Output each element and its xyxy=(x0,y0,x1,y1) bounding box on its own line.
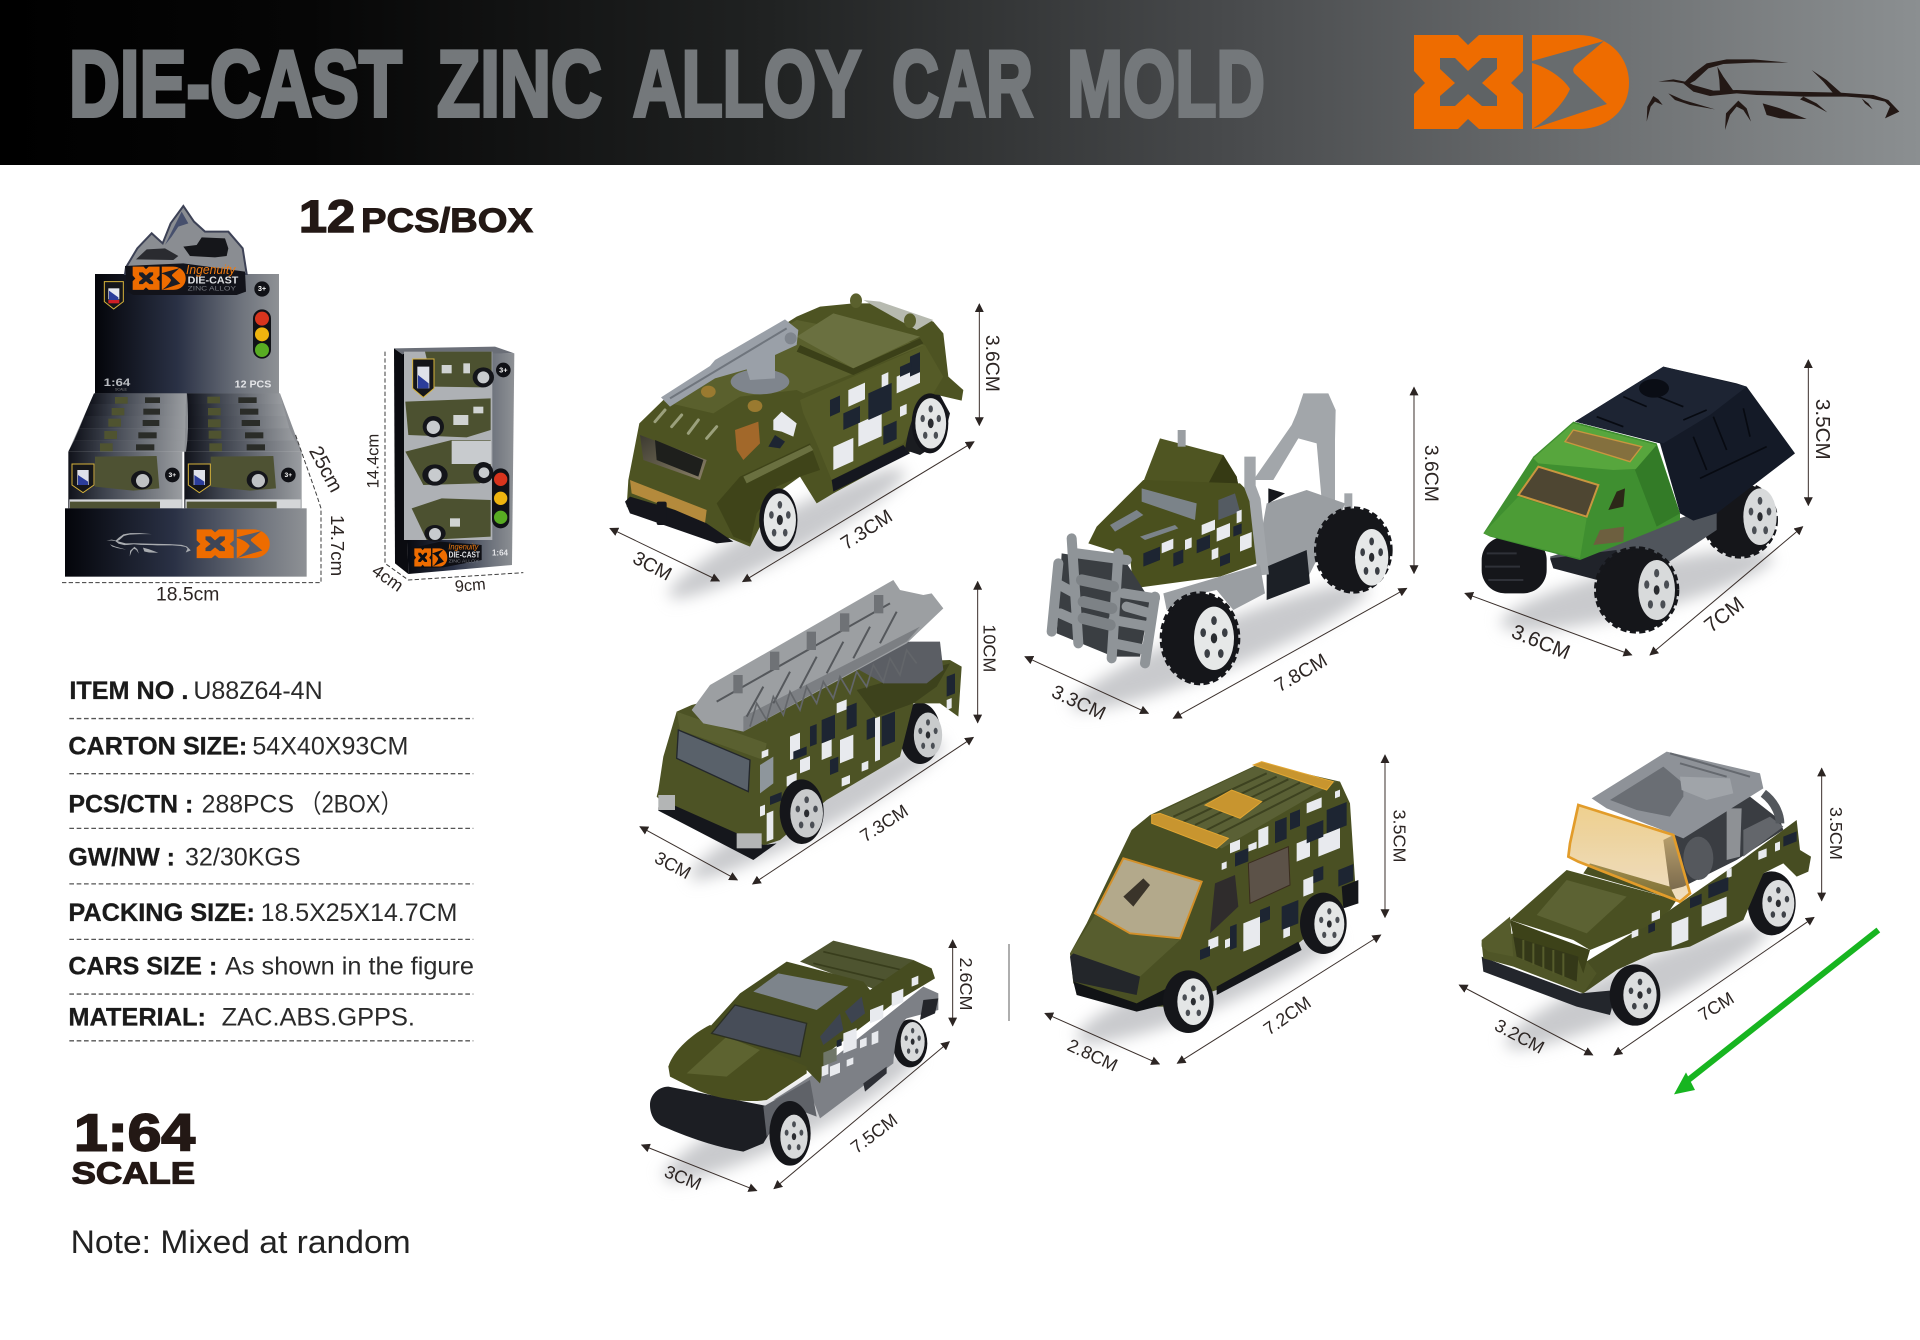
dimensions: 2.8CM xyxy=(1064,1035,1121,1075)
cars size: CARS SIZE : xyxy=(68,953,217,981)
title: MOLD xyxy=(1067,31,1265,136)
carton size xyxy=(68,733,408,761)
single retail box xyxy=(363,347,523,596)
retail box dimensions: 4cm xyxy=(368,560,407,596)
dimensions: 3.6CM xyxy=(981,335,1002,392)
title: CAR xyxy=(892,31,1033,136)
rear wheel xyxy=(1316,508,1391,592)
display box illustration xyxy=(62,206,348,606)
car: tow truck xyxy=(1025,387,1441,728)
box dimensions: 14.7cm xyxy=(327,515,348,576)
car: ladder fire truck xyxy=(640,580,999,895)
dimensions xyxy=(1045,755,1409,1075)
exhaust stack xyxy=(1250,457,1263,575)
car: green armored vehicle xyxy=(1465,360,1834,664)
packing size xyxy=(68,900,457,927)
interior xyxy=(1663,797,1783,890)
dimensions: 3.3CM xyxy=(1048,682,1109,725)
dimensions: 7.8CM xyxy=(1271,650,1331,697)
dimensions: 7.3CM xyxy=(856,800,912,846)
fender xyxy=(1163,565,1265,610)
scale label xyxy=(104,377,130,392)
grille xyxy=(1513,937,1578,982)
side panel xyxy=(800,345,943,480)
scale mark: SCALE xyxy=(72,1157,195,1191)
car: van xyxy=(1045,755,1409,1075)
dimensions xyxy=(1459,768,1846,1058)
scale mark: 1:64 xyxy=(74,1105,195,1162)
front left tire xyxy=(1482,537,1547,593)
pieces per carton xyxy=(68,791,403,819)
front box left xyxy=(68,452,182,508)
cars size: As shown in the figure xyxy=(225,953,474,981)
car silhouette xyxy=(1647,59,1899,130)
carton size: CARTON SIZE: xyxy=(68,733,247,761)
box bottom logo: Ingenuity xyxy=(448,542,479,551)
dimensions: 3.6CM xyxy=(1420,445,1441,502)
pieces per carton: 288PCS xyxy=(202,791,294,819)
windshield xyxy=(1095,858,1202,938)
fairing xyxy=(1143,438,1238,485)
body xyxy=(627,303,963,547)
dimensions: 3.5CM xyxy=(1389,810,1409,862)
cargo bed xyxy=(800,941,913,990)
rear wheel xyxy=(1704,483,1777,557)
carton size: 54X40X93CM xyxy=(252,733,408,761)
front wheel xyxy=(780,779,824,844)
tier rows of boxes xyxy=(68,393,302,452)
dimensions xyxy=(1025,387,1441,725)
box dimensions: 25cm xyxy=(304,443,347,496)
dimensions: 3CM xyxy=(662,1161,704,1194)
badge xyxy=(413,359,434,397)
retail box dimensions: 14.4cm xyxy=(363,434,382,488)
weight xyxy=(68,844,301,872)
age mark: 3+ xyxy=(258,284,266,293)
rear wheel xyxy=(1300,893,1347,954)
windows xyxy=(677,730,750,792)
dimensions: 7.5CM xyxy=(847,1110,901,1157)
dimensions: 7CM xyxy=(1695,988,1738,1025)
material xyxy=(68,1004,415,1032)
count label: 12 PCS xyxy=(235,379,272,390)
front bumper xyxy=(658,805,777,860)
front box right xyxy=(184,452,302,508)
dimensions: 3.2CM xyxy=(1491,1015,1548,1058)
green arrow xyxy=(1674,930,1878,1094)
dimensions xyxy=(1465,360,1834,664)
turntable xyxy=(853,642,943,683)
dimensions: 7.3CM xyxy=(837,506,897,555)
side windows xyxy=(1248,847,1290,903)
box bottom logo: ZINC ALLOY xyxy=(449,559,479,565)
topper mountain header xyxy=(125,206,247,295)
box bottom logo xyxy=(412,542,509,568)
camouflage xyxy=(822,976,918,1080)
rear wheel xyxy=(899,703,942,764)
traffic light xyxy=(253,309,271,359)
topper mountain header: Ingenuity xyxy=(186,262,237,277)
scale mark xyxy=(72,1105,195,1191)
crane arm xyxy=(1253,393,1336,502)
scale label: 1:64 xyxy=(104,377,130,389)
badge xyxy=(104,282,123,309)
weight: GW/NW : xyxy=(68,844,175,872)
roof lights xyxy=(1152,762,1333,848)
armor shell xyxy=(1575,367,1795,521)
grille and bumper xyxy=(1070,953,1140,995)
front wheel xyxy=(1610,964,1660,1026)
spec list xyxy=(68,678,474,1261)
hood xyxy=(1510,870,1677,950)
dimensions xyxy=(610,304,1002,586)
camouflage xyxy=(1143,505,1252,597)
scale label: SCALE xyxy=(115,388,128,392)
topper mountain header: ZINC ALLOY xyxy=(188,285,237,292)
car: fire truck with cannon xyxy=(610,293,1002,614)
dimensions xyxy=(642,940,976,1194)
traffic light xyxy=(492,468,509,528)
pieces per box heading xyxy=(299,191,533,242)
hood xyxy=(668,1025,807,1101)
title: ALLOY xyxy=(633,31,861,136)
front wheel xyxy=(1596,548,1677,632)
black front xyxy=(650,1087,773,1152)
rear wheel xyxy=(905,393,950,455)
windows xyxy=(712,1005,807,1057)
front wheel xyxy=(1163,970,1214,1033)
box faces xyxy=(394,347,514,574)
age mark xyxy=(254,281,270,297)
hood and cab xyxy=(1088,480,1262,588)
car: jeep xyxy=(1459,752,1878,1094)
camouflage xyxy=(1200,784,1353,972)
header banner xyxy=(0,0,1920,165)
note: Note: Mixed at random xyxy=(71,1225,411,1261)
fender xyxy=(1482,917,1513,957)
dimensions: 3.6CM xyxy=(1508,620,1573,664)
windows xyxy=(1142,488,1197,520)
pieces per box heading: PCS/BOX xyxy=(361,202,533,240)
dimensions: 2.6CM xyxy=(956,958,976,1010)
box back panel xyxy=(95,274,279,394)
weight: 32/30KGS xyxy=(185,844,301,872)
camouflage xyxy=(830,352,920,472)
ladder xyxy=(692,580,943,732)
title: ZINC xyxy=(437,31,602,136)
material: ZAC.ABS.GPPS. xyxy=(222,1004,415,1032)
topper logo xyxy=(133,267,186,290)
windows xyxy=(1518,467,1598,517)
tray front xyxy=(65,508,307,577)
side body xyxy=(1580,820,1811,993)
age mark: 3+ xyxy=(499,365,508,374)
dimensions: 3.5CM xyxy=(1811,399,1834,460)
roll bar xyxy=(1727,808,1742,860)
front wheel xyxy=(769,1101,811,1166)
front grille xyxy=(630,480,707,523)
material: MATERIAL: xyxy=(68,1004,206,1032)
dimensions xyxy=(640,582,999,884)
pieces per carton: PCS/CTN : xyxy=(68,791,193,819)
separator line xyxy=(1008,944,1010,1021)
front wheel xyxy=(1162,593,1238,683)
box bottom logo: DIE-CAST xyxy=(449,550,480,559)
front panel xyxy=(1482,933,1597,993)
topper mountain header: DIE-CAST xyxy=(188,276,238,287)
XD logo xyxy=(1414,35,1629,129)
grey lower body xyxy=(773,987,938,1118)
body xyxy=(657,660,962,847)
packing size: 18.5X25X14.7CM xyxy=(261,900,457,927)
pieces per box heading: 12 xyxy=(299,191,355,242)
dimensions: 3CM xyxy=(651,848,694,883)
cab xyxy=(710,960,935,1083)
base xyxy=(1482,957,1617,1015)
camouflage xyxy=(1632,831,1797,963)
rear wheel xyxy=(1748,871,1796,935)
windshield xyxy=(1568,805,1690,902)
retail box dimensions: 9cm xyxy=(454,575,486,596)
box dimensions: 18.5cm xyxy=(156,585,219,606)
striped roof xyxy=(1150,763,1337,848)
front wheel xyxy=(759,488,797,552)
retail box dimensions xyxy=(363,352,523,596)
item number: U88Z64-4N xyxy=(193,678,323,705)
underbody xyxy=(1550,507,1717,583)
front box left: 3+ xyxy=(169,472,176,479)
window with cars xyxy=(404,352,494,542)
pieces per carton: （2BOX） xyxy=(299,791,403,819)
title xyxy=(69,31,1265,136)
body xyxy=(1070,763,1358,1007)
dimensions: 10CM xyxy=(979,624,999,672)
dimensions: 3.5CM xyxy=(1826,807,1846,860)
title: DIE-CAST xyxy=(69,31,402,136)
chassis xyxy=(1260,490,1345,580)
box dimensions xyxy=(62,433,348,606)
lights xyxy=(701,386,762,412)
wheel arch panel xyxy=(717,443,820,543)
hood vents xyxy=(655,410,717,438)
dimensions: 7.2CM xyxy=(1260,992,1315,1039)
box bottom logo: 1:64 xyxy=(492,549,509,558)
grey soft top xyxy=(1592,752,1763,838)
roof top xyxy=(663,320,925,413)
age mark xyxy=(496,363,511,377)
dimensions: 7CM xyxy=(1700,592,1749,637)
packing size: PACKING SIZE: xyxy=(68,900,255,927)
cab windows xyxy=(640,435,707,480)
cannon xyxy=(661,319,798,407)
camouflage xyxy=(760,656,955,844)
item number xyxy=(69,678,323,705)
rear wheel xyxy=(893,1019,927,1067)
item number: ITEM NO . xyxy=(69,678,188,705)
bull bar xyxy=(1052,538,1155,663)
dimensions: 3CM xyxy=(629,548,675,586)
cars size xyxy=(68,953,474,981)
car: pickup truck xyxy=(642,940,976,1199)
front box right: 3+ xyxy=(285,472,292,479)
green body xyxy=(1483,422,1680,560)
